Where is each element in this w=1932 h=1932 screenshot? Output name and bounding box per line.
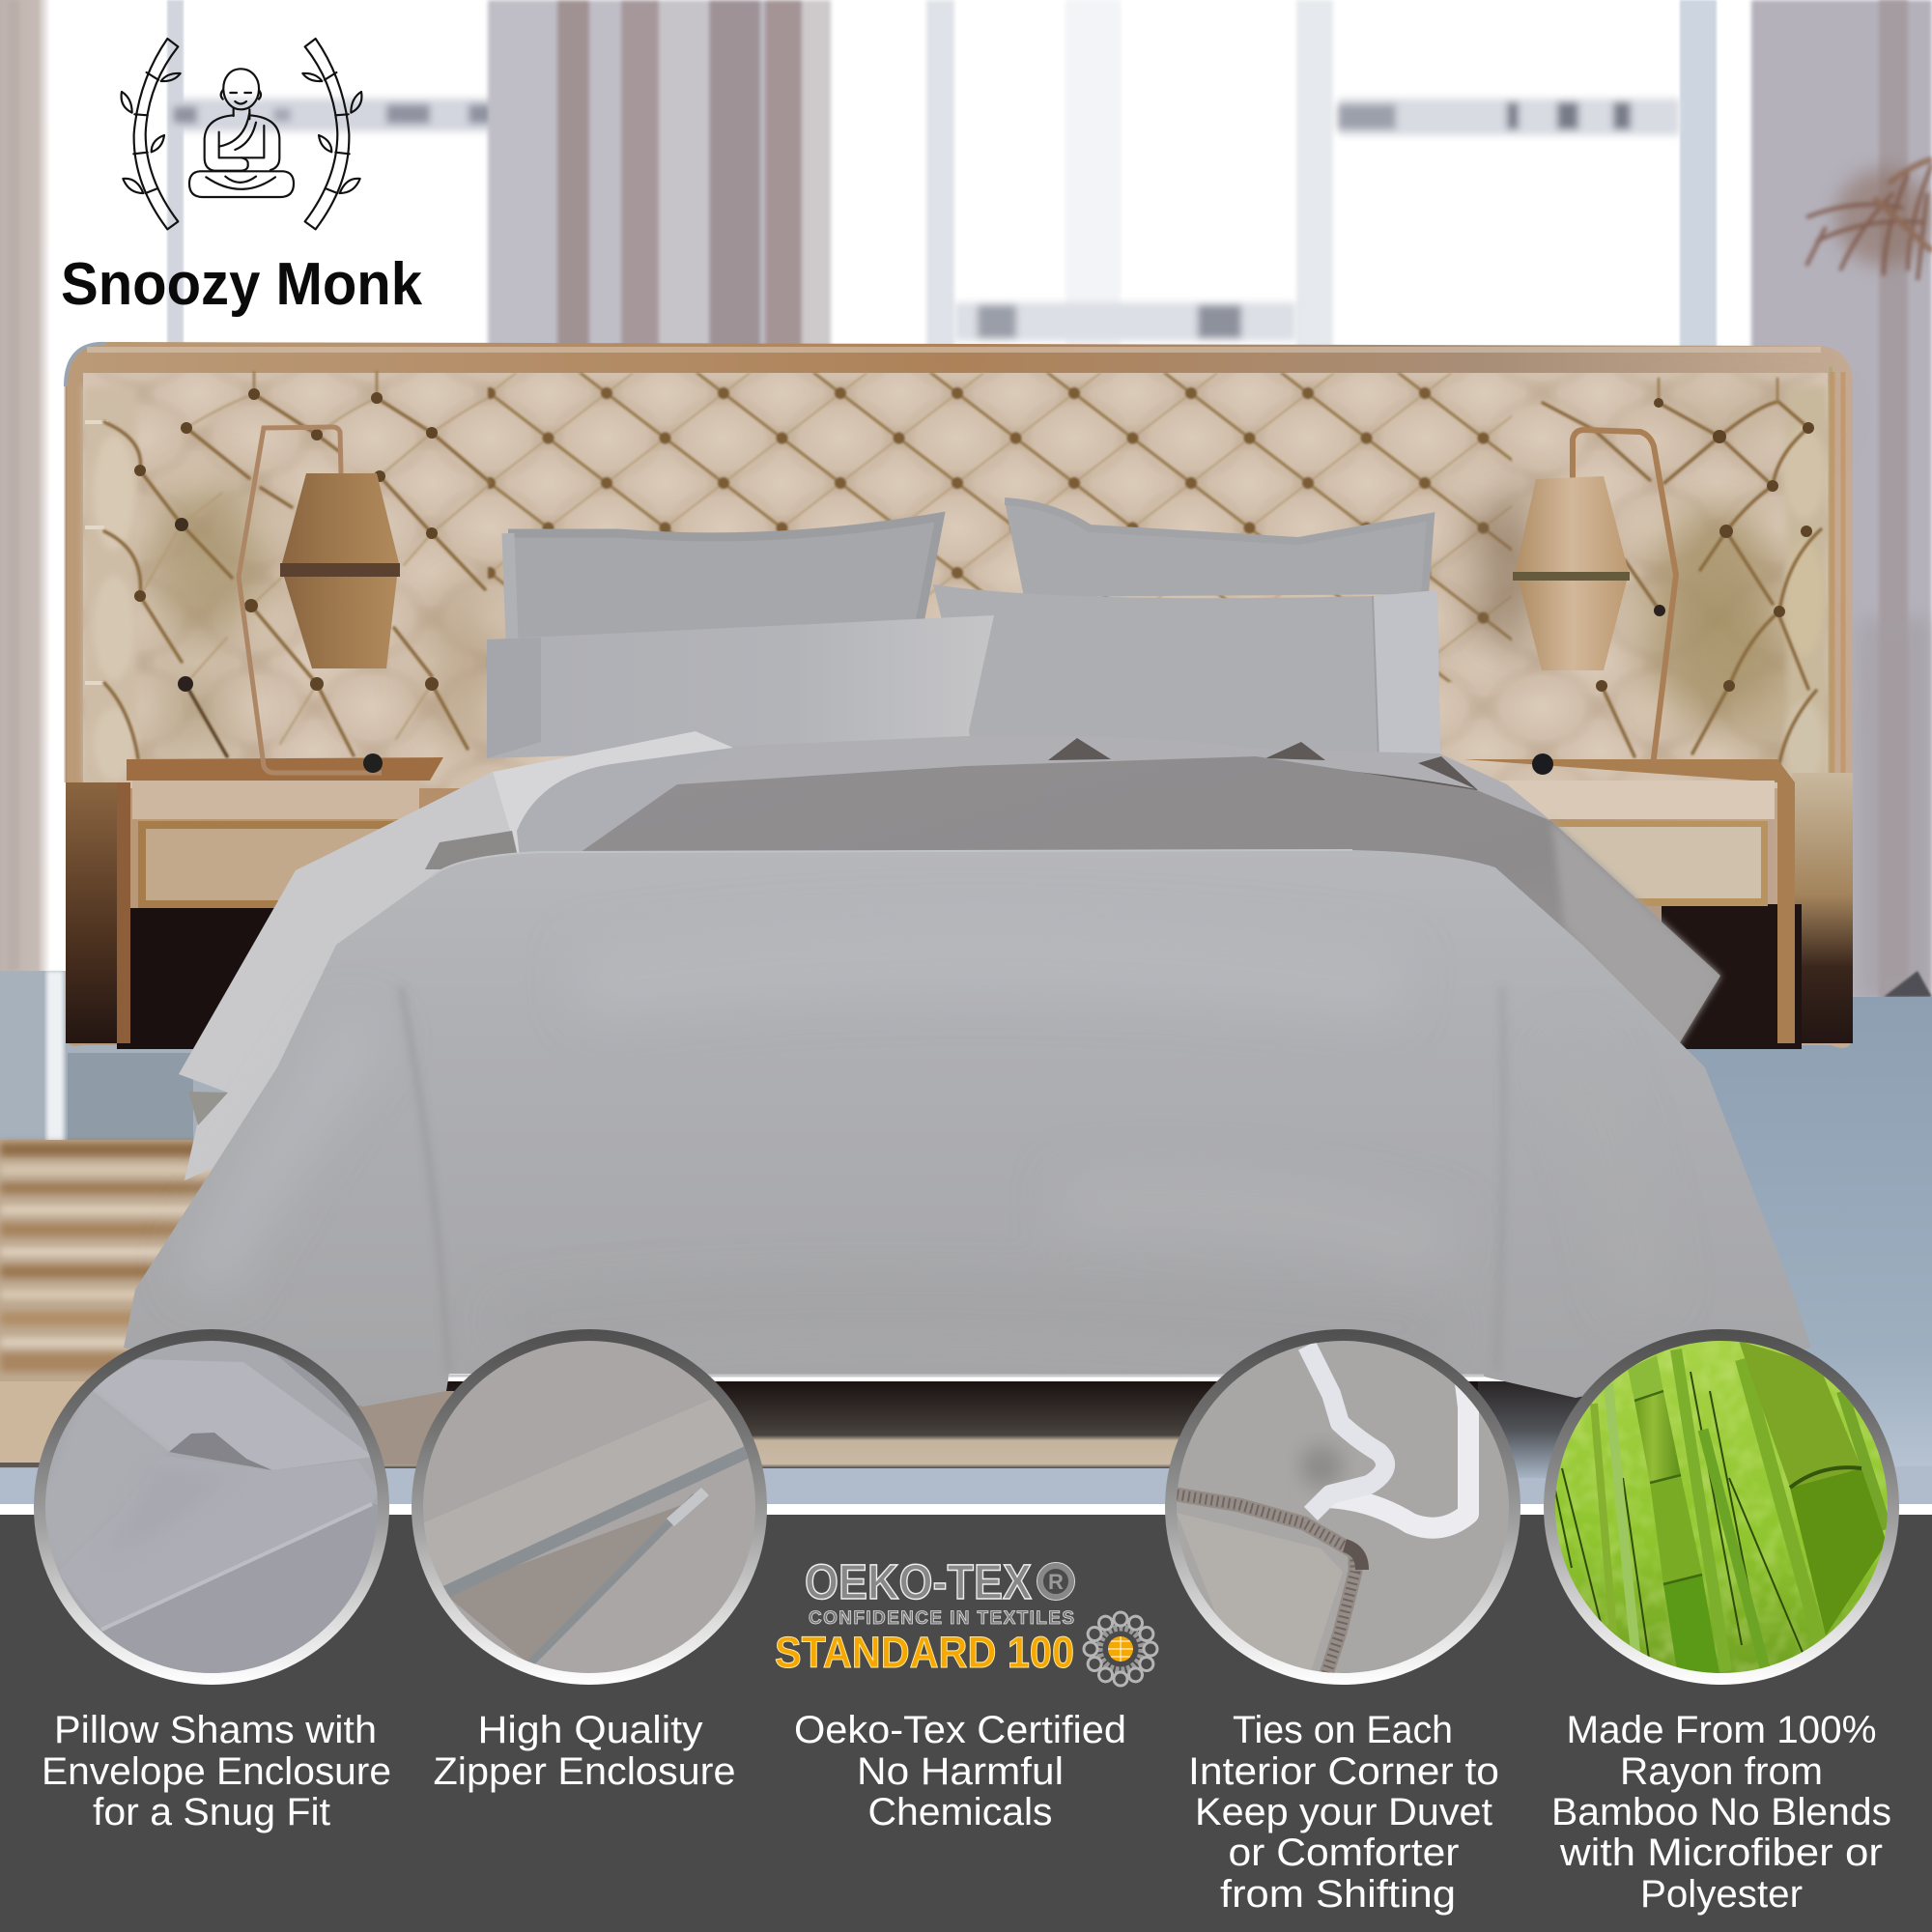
hand placed left tufting seams	[104, 372, 491, 758]
circle: pillow sham envelope	[29, 1329, 396, 1685]
caption: zipper: High Quality	[477, 1709, 703, 1751]
OEKO-TEX logo	[775, 1554, 1157, 1686]
caption: bamboo rayon: Made From 100%	[1567, 1709, 1876, 1751]
caption: oeko-tex: No Harmful	[857, 1750, 1064, 1793]
caption: zipper: Zipper Enclosure	[433, 1750, 736, 1793]
caption: pillow shams: Pillow Shams with	[54, 1709, 377, 1751]
right side flutes	[1783, 367, 1843, 966]
white sheet on left	[179, 731, 733, 1180]
registered mark	[1037, 1563, 1074, 1600]
brand name: Snoozy Monk	[61, 251, 422, 318]
caption: ties: Keep your Duvet	[1195, 1791, 1492, 1833]
emblem	[1084, 1612, 1157, 1686]
caption: oeko-tex: Chemicals	[867, 1791, 1053, 1833]
left lamp	[239, 427, 400, 773]
large stalk right	[1739, 1341, 1887, 1635]
large stalk centre	[1628, 1355, 1719, 1676]
caption: ties: Interior Corner to	[1188, 1750, 1499, 1793]
back left pillow sham	[508, 517, 940, 639]
bottom info band	[0, 1504, 1932, 1932]
caption: oeko-tex: Oeko-Tex Certified	[794, 1709, 1126, 1751]
right bamboo	[302, 39, 361, 229]
top sheet band	[676, 736, 1551, 821]
monk figure	[189, 69, 294, 197]
hand placed right tufting seams	[1543, 379, 1821, 763]
OEKO-TEX logo: OEKO-TEX	[805, 1554, 1032, 1609]
center curtain	[488, 0, 831, 359]
under bed shadow	[357, 1381, 1594, 1478]
left curtain	[0, 0, 50, 971]
caption: bamboo rayon: Bamboo No Blends	[1551, 1791, 1891, 1833]
left nightstand	[117, 757, 443, 1049]
front right pillow	[933, 584, 1440, 759]
left bamboo	[122, 39, 181, 229]
caption: zipper	[433, 1709, 736, 1793]
caption: ties	[1188, 1709, 1499, 1916]
circle: bamboo forest	[1544, 1329, 1899, 1685]
caption: bamboo rayon: Rayon from	[1620, 1750, 1823, 1793]
headboard	[66, 342, 1853, 1048]
caption: bamboo rayon: with Microfiber or	[1559, 1832, 1883, 1874]
caption: pillow shams	[42, 1709, 391, 1833]
right nightstand	[1463, 759, 1802, 1049]
caption: ties: Ties on Each	[1233, 1709, 1453, 1751]
caption: ties: from Shifting	[1220, 1873, 1456, 1916]
caption: pillow shams: Envelope Enclosure	[42, 1750, 391, 1793]
left side flutes	[83, 386, 137, 782]
caption: oeko-tex	[794, 1709, 1126, 1833]
logo: bamboo wreath and monk	[122, 39, 361, 229]
front left pillow	[487, 615, 994, 758]
caption: bamboo rayon: Polyester	[1640, 1873, 1803, 1916]
main duvet	[124, 850, 1811, 1406]
registered mark: R	[1048, 1570, 1064, 1594]
right lamp	[1513, 430, 1676, 775]
right curtain and plant	[1751, 0, 1932, 1000]
circle: zipper enclosure	[412, 1329, 767, 1685]
caption: ties: or Comforter	[1229, 1832, 1459, 1874]
caption: bamboo rayon	[1551, 1709, 1891, 1916]
caption: pillow shams: for a Snug Fit	[93, 1791, 330, 1833]
tuft buttons at the sides	[134, 388, 1814, 692]
floor	[0, 971, 1932, 1509]
OEKO-TEX logo: STANDARD 100	[775, 1628, 1074, 1677]
circle: corner ties	[1165, 1329, 1520, 1685]
duvet underside fold	[567, 756, 1720, 1052]
olive shading	[150, 396, 1826, 773]
back right pillow sham	[1005, 501, 1431, 597]
rug	[0, 1140, 483, 1468]
OEKO-TEX logo: CONFIDENCE IN TEXTILES	[809, 1608, 1074, 1629]
zipper slider	[667, 1488, 709, 1526]
